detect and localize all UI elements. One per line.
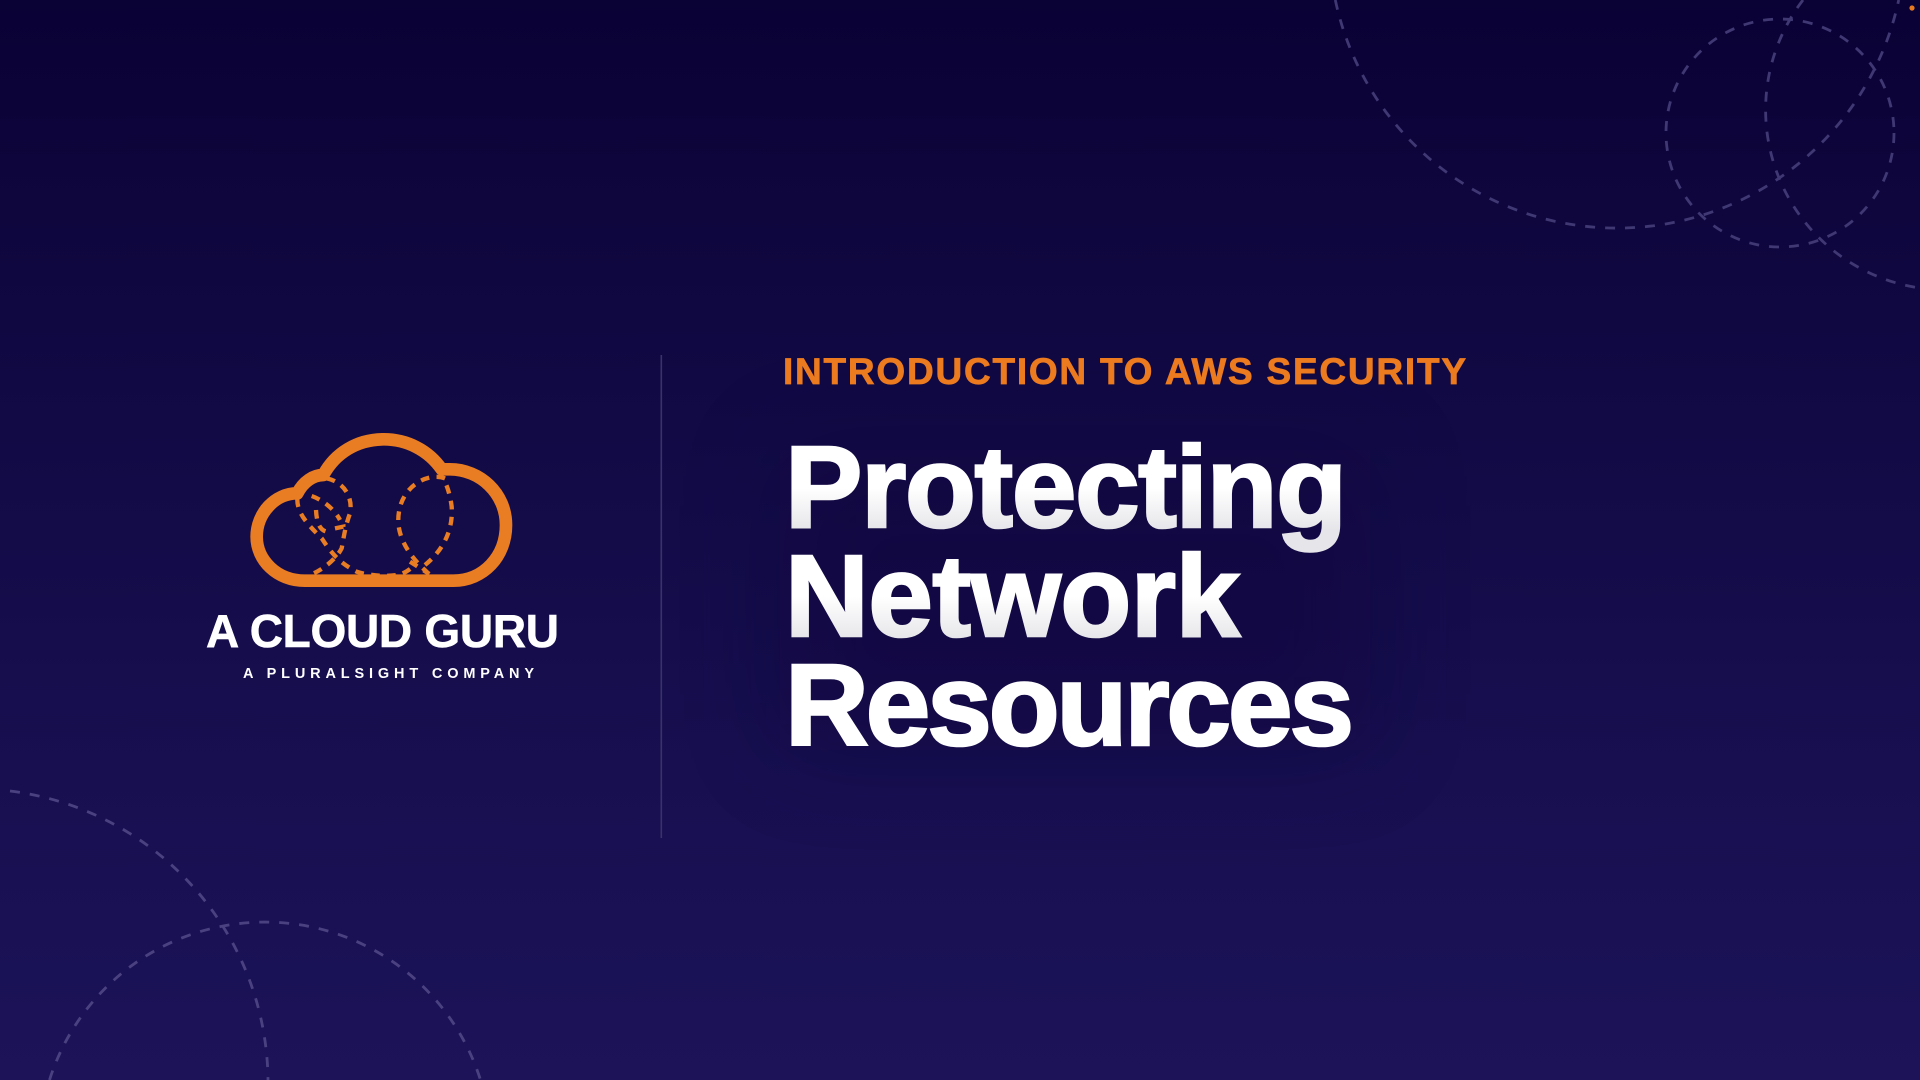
icon: cloud with dashed balloons [257,439,506,581]
decorative dashed circles: bottom left [10,791,480,1080]
title shadow [780,450,1370,750]
title: Network [785,531,1240,661]
orange dot [1909,5,1915,11]
wordmark: A CLOUD GURU [206,605,559,657]
logo: A Cloud Guru [206,439,559,682]
tagline: A PLURALSIGHT COMPANY [243,666,534,682]
vertical divider [660,355,662,838]
decorative dashed circles: top right [1335,0,1920,288]
eyebrow heading: INTRODUCTION TO AWS SECURITY [783,351,1466,392]
title [785,422,1354,770]
title: Resources [785,640,1354,770]
title: Protecting [785,422,1347,552]
